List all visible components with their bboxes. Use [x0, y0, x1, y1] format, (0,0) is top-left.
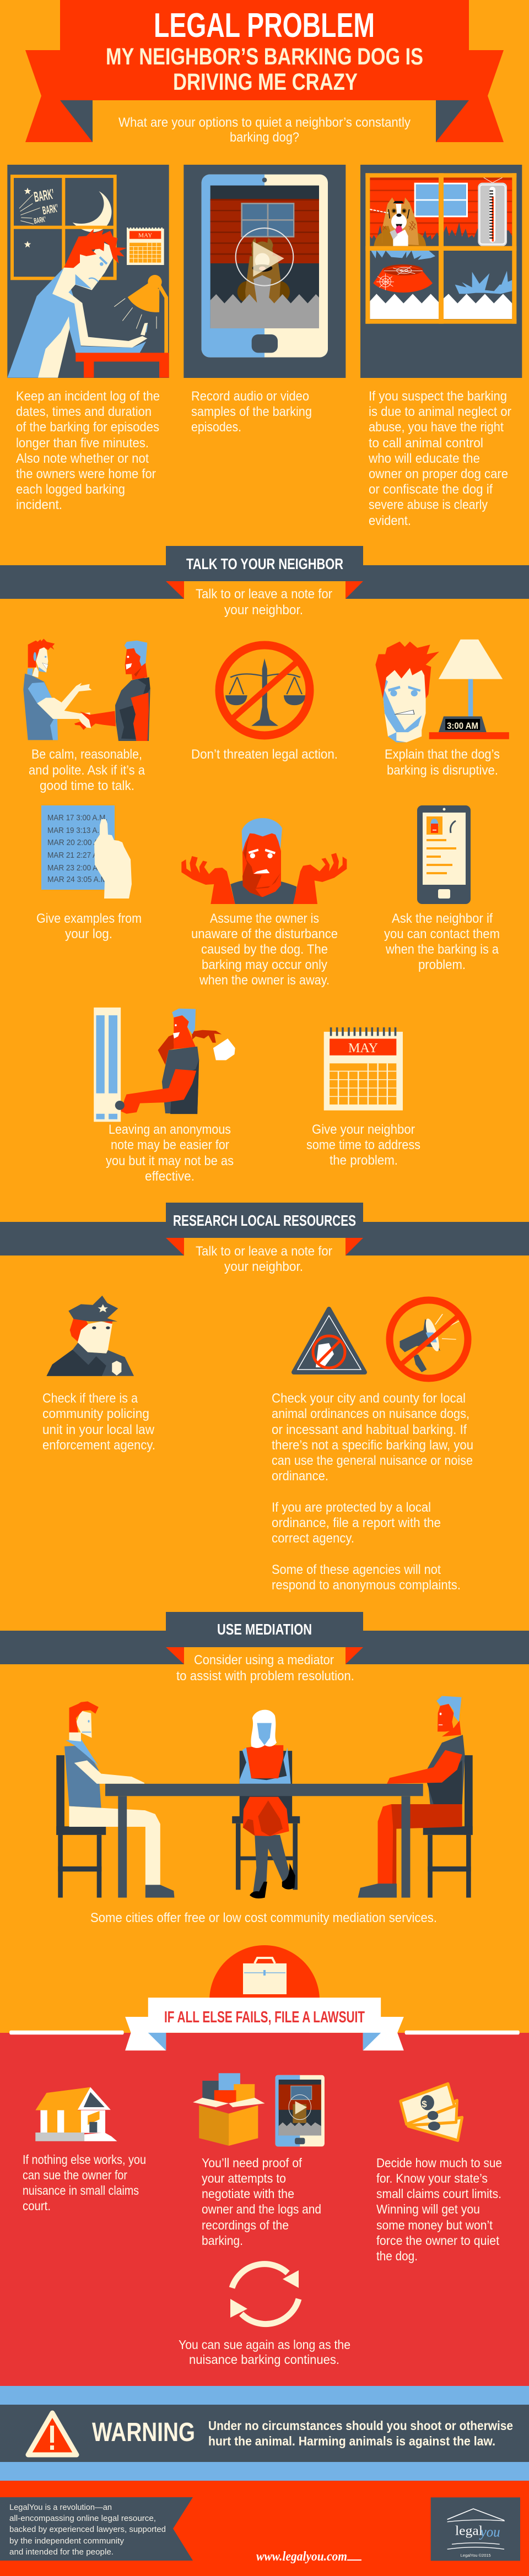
text: how much to sue: some money but won’t [376, 2218, 493, 2232]
text: local ordinances: ordinance, file a report with the [272, 1516, 441, 1530]
icon: stack of dollar bills [401, 2083, 462, 2140]
grass: lower right [455, 271, 512, 294]
left neighbor [64, 1701, 175, 1898]
text: how much to sue: Decide how much to sue [376, 2156, 502, 2170]
text: keep an incident log: incident. [16, 497, 62, 512]
footer: about LegalYou: backed by experienced lawyers, supported [9, 2525, 166, 2534]
text: sue again: nuisance barking continues. [189, 2352, 339, 2367]
section header: talk to your neighbor: your neighbor. [224, 603, 303, 618]
footer: about LegalYou: LegalYou is a revolution—an [9, 2503, 112, 2512]
icon: man leaving note at a door [94, 1008, 235, 1122]
text: keep an incident log: the owners were home for [16, 467, 156, 481]
text: explain disruption: Explain that the dog’s [385, 747, 500, 762]
title banner [25, 0, 504, 142]
text: local ordinances: If you are protected by a local [272, 1500, 431, 1515]
section header: use mediation [0, 1612, 529, 1684]
desk [75, 353, 169, 378]
section header: use mediation: to assist with problem resolution. [176, 1669, 354, 1684]
panel: man keeping a log at night: BARK’ [33, 186, 55, 205]
icon: crossed-out megaphone [390, 1300, 468, 1378]
text: ask the neighbor: you can contact them [384, 927, 500, 941]
icon: log sheet with pointing hand: MAR 23 2:00 A.M. [47, 863, 108, 873]
text: record audio or video: samples of the barking [191, 404, 312, 419]
title banner: DRIVING ME CRAZY [173, 69, 358, 95]
thermometer [479, 177, 506, 245]
right neighbor [358, 1696, 465, 1898]
text: assume the owner is unaware [191, 911, 338, 988]
section header: research local resources: RESEARCH LOCAL RESOURCES [173, 1212, 356, 1229]
text: assume the owner is unaware: caused by the dog. The [201, 942, 328, 957]
text: explain disruption [385, 747, 500, 778]
text: proof of attempts: negotiate with the [202, 2187, 294, 2201]
text: proof of attempts: owner and the logs and [202, 2202, 321, 2216]
text: sue for nuisance: court. [23, 2199, 51, 2213]
text: proof of attempts: recordings of the [202, 2218, 289, 2232]
icon: crossed-out scales of justice [219, 645, 310, 735]
text: record audio or video: Record audio or video [191, 389, 309, 404]
text: proof of attempts: barking. [202, 2233, 243, 2248]
text: be calm: Be calm, reasonable, [31, 747, 142, 762]
section background: lawsuit [0, 2033, 529, 2386]
icon: desk lamp [114, 275, 166, 354]
text: animal neglect [368, 389, 511, 528]
text: local ordinances: Some of these agencies will not [272, 1562, 441, 1577]
text: animal neglect: abuse, you have the right [369, 420, 504, 435]
text: local ordinances [272, 1391, 473, 1593]
text: assume the owner is unaware: unaware of the disturbance [191, 927, 338, 941]
panel: warning band [0, 2386, 529, 2481]
icon: box of evidence [193, 2073, 265, 2146]
icon: no barking sign [294, 1309, 365, 1372]
text: keep an incident log: longer than five minutes. [16, 436, 149, 451]
section header: talk to your neighbor: TALK TO YOUR NEIGHBOR [186, 555, 343, 572]
icon: warning triangle [28, 2413, 77, 2455]
text: assume the owner is unaware: barking may occur only [202, 957, 327, 972]
text: community policing: Check if there is a [42, 1391, 138, 1406]
icon: repeat arrows [230, 2264, 299, 2324]
panel: warning band: hurt the animal. Harming animals is against the law. [208, 2434, 495, 2448]
footer: website address: www.legalyou.com [256, 2550, 347, 2564]
text: anonymous note: note may be easier for [111, 1138, 229, 1152]
panel: neglected dog seen through a window [360, 165, 522, 378]
text: be calm: and polite. Ask if it’s a [29, 763, 145, 778]
text: local ordinances: respond to anonymous complaints. [272, 1578, 461, 1593]
icon: food bowl with cobwebs [373, 264, 433, 293]
text: animal neglect: owner on proper dog care [369, 467, 508, 481]
icon: courthouse [35, 2087, 117, 2141]
text: ask the neighbor: problem. [418, 957, 466, 972]
text: how much to sue: for. Know your state’s [376, 2171, 488, 2185]
grass: lower left [371, 251, 435, 260]
footer: LegalYou logo: LegalYou ©2015 [461, 2553, 491, 2558]
table [105, 1784, 423, 1898]
icon: phone with contact [417, 805, 471, 904]
text: ask the neighbor [384, 911, 500, 972]
text: keep an incident log: Also note whether or not [16, 451, 149, 466]
text: local ordinances: ordinance. [272, 1469, 328, 1484]
icon: log sheet with pointing hand [41, 805, 132, 899]
text: give examples [36, 911, 142, 941]
text: local ordinances: or incessant and habitual barking. If [272, 1422, 467, 1437]
text: keep an incident log: dates, times and duration [16, 404, 152, 419]
illustration: mediation table [56, 1696, 473, 1898]
section header: use mediation: Consider using a mediator [194, 1653, 334, 1668]
illustration: man writing [7, 229, 148, 378]
text: local ordinances: can use the general nuisance or noise [272, 1453, 473, 1468]
text: sue for nuisance [23, 2152, 146, 2213]
icon: tired man beside 3 AM clock and lamp: 3:00 AM [447, 721, 478, 731]
title banner: MY NEIGHBOR’S BARKING DOG IS [106, 44, 423, 70]
section header: talk to your neighbor: Talk to or leave a note for [196, 587, 332, 602]
text: keep an incident log: of the barking for episodes [16, 420, 159, 435]
icon: wall calendar: MAY [138, 232, 152, 239]
panel: man keeping a log at night [7, 165, 169, 378]
icon: log sheet with pointing hand: MAR 20 2:00 A.M. [47, 838, 109, 847]
icon: phone with recording [276, 2075, 325, 2146]
text: give neighbor time: some time to address [306, 1138, 420, 1152]
text: explain disruption: barking is disruptive. [387, 763, 498, 778]
text: local ordinances: correct agency. [272, 1531, 354, 1546]
panel: phone recording video [183, 165, 346, 378]
text: sue for nuisance: nuisance in small claims [23, 2183, 139, 2198]
footer: about LegalYou: and intended for the people. [9, 2547, 114, 2557]
text: ask the neighbor: when the barking is a [385, 942, 499, 957]
panel: man keeping a log at night: BARK’ [41, 202, 59, 217]
text: keep an incident log [16, 389, 160, 512]
text: proof of attempts [202, 2156, 321, 2248]
footer: LegalYou logo: you [479, 2523, 500, 2540]
text: animal neglect: is due to animal neglect or [369, 404, 511, 419]
text: community policing: unit in your local law [42, 1422, 155, 1437]
icon: log sheet with pointing hand: MAR 19 3:13 A.M. [47, 826, 107, 835]
icon: May calendar: MAY [348, 1041, 378, 1056]
intro question [118, 115, 411, 145]
text: don't threaten: Don’t threaten legal action. [191, 747, 338, 762]
text: community policing: enforcement agency. [42, 1438, 155, 1453]
text: community policing: community policing [42, 1406, 149, 1421]
text: keep an incident log: each logged barking [16, 482, 125, 497]
mediator [240, 1710, 295, 1898]
text: animal neglect: severe abuse is clearly [369, 497, 488, 512]
icon: log sheet with pointing hand: MAR 24 3:05 A.M. [47, 875, 109, 884]
text: assume the owner is unaware: Assume the owner is [210, 911, 319, 926]
text: record audio or video [191, 389, 312, 435]
section header: talk to your neighbor [0, 546, 529, 618]
text: give examples: Give examples from [36, 911, 142, 926]
panel: warning band: WARNING [92, 2418, 195, 2447]
footer: LegalYou logo: legal [455, 2524, 483, 2539]
footer: about LegalYou: by the independent community [9, 2536, 125, 2546]
icon: wall calendar [127, 228, 164, 265]
text: how much to sue [376, 2156, 502, 2263]
icon: briefcase on red circle [209, 1945, 320, 2055]
text: give neighbor time: the problem. [330, 1153, 398, 1168]
text: give neighbor time: Give your neighbor [312, 1122, 415, 1137]
panel: man keeping a log at night: BARK’ [33, 214, 47, 225]
icon: play button [236, 228, 293, 286]
text: local ordinances: animal ordinances on nuisance dogs, [272, 1406, 469, 1421]
section header: research local resources: your neighbor. [224, 1259, 303, 1274]
fence [210, 294, 319, 328]
heading: if all else fails: IF ALL ELSE FAILS, FILE A LAWSUIT [164, 2009, 365, 2026]
text: sue for nuisance: If nothing else works, you [23, 2152, 146, 2167]
text: give neighbor time [306, 1122, 420, 1168]
text: local ordinances: there’s not a specific barking law, you [272, 1438, 473, 1453]
icon: tired man beside 3 AM clock and lamp [375, 640, 509, 742]
text: sue again [179, 2337, 350, 2367]
section header: research local resources [0, 1203, 529, 1274]
intro question: barking dog? [230, 130, 299, 145]
text: anonymous note: effective. [145, 1169, 195, 1184]
fence [370, 294, 512, 319]
text: how much to sue: force the owner to quiet [376, 2233, 500, 2248]
text: anonymous note: Leaving an anonymous [109, 1122, 231, 1137]
text: give examples: your log. [65, 927, 112, 941]
text: animal neglect: to call animal control [369, 436, 483, 451]
text: be calm: good time to talk. [40, 778, 134, 793]
icon: shrugging owner [181, 818, 347, 904]
footer background [0, 2481, 529, 2576]
text: how much to sue: small claims court limits. [376, 2187, 501, 2201]
icon: May calendar [324, 1027, 403, 1111]
section header: file a lawsuit [9, 1998, 520, 2050]
icon: log sheet with pointing hand: MAR 17 3:00 A.M. [47, 813, 107, 822]
section header: use mediation: USE MEDIATION [217, 1621, 312, 1638]
text: animal neglect: evident. [369, 513, 411, 528]
intro question: What are your options to quiet a neighbor’s constantly [118, 115, 411, 130]
icon: police officer [46, 1296, 134, 1376]
text: anonymous note [106, 1122, 234, 1184]
text: community policing [42, 1391, 155, 1453]
text: anonymous note: you but it may not be as [106, 1154, 234, 1168]
section header: research local resources: Talk to or leave a note for [196, 1244, 332, 1259]
text: ask the neighbor: Ask the neighbor if [392, 911, 493, 926]
text: community mediation services: Some cities offer free or low cost community mediation services. [90, 1911, 437, 1925]
text: keep an incident log: Keep an incident log of the [16, 389, 160, 404]
text: how much to sue: Winning will get you [376, 2202, 480, 2216]
icon: stack of dollar bills: $ [422, 2099, 427, 2109]
text: assume the owner is unaware: when the owner is away. [199, 973, 330, 988]
title banner: LEGAL PROBLEM [154, 7, 375, 45]
footer: about LegalYou [0, 2497, 193, 2561]
chairs [56, 1751, 473, 1898]
illustration: dimmed dog [237, 238, 290, 304]
footer: about LegalYou: all-encompassing online legal resource, [9, 2514, 156, 2523]
text: local ordinances: Check your city and county for local [272, 1391, 466, 1406]
text: animal neglect: or confiscate the dog if [369, 482, 493, 497]
text: proof of attempts: your attempts to [202, 2171, 286, 2185]
window frame [365, 173, 516, 324]
text: sue again: You can sue again as long as the [179, 2337, 350, 2352]
text: sue for nuisance: can sue the owner for [23, 2168, 127, 2182]
text: animal neglect: who will educate the [368, 451, 480, 466]
text: animal neglect: If you suspect the barking [369, 389, 507, 404]
icon: two neighbors shaking hands [23, 638, 150, 741]
text: record audio or video: episodes. [191, 420, 241, 435]
text: how much to sue: the dog. [376, 2249, 418, 2263]
text: be calm [29, 747, 145, 793]
illustration: chained dog [370, 197, 426, 252]
icon: log sheet with pointing hand: MAR 21 2:27 A.M. [47, 851, 108, 860]
text: proof of attempts: You’ll need proof of [202, 2156, 303, 2170]
footer: LegalYou logo [431, 2497, 520, 2561]
